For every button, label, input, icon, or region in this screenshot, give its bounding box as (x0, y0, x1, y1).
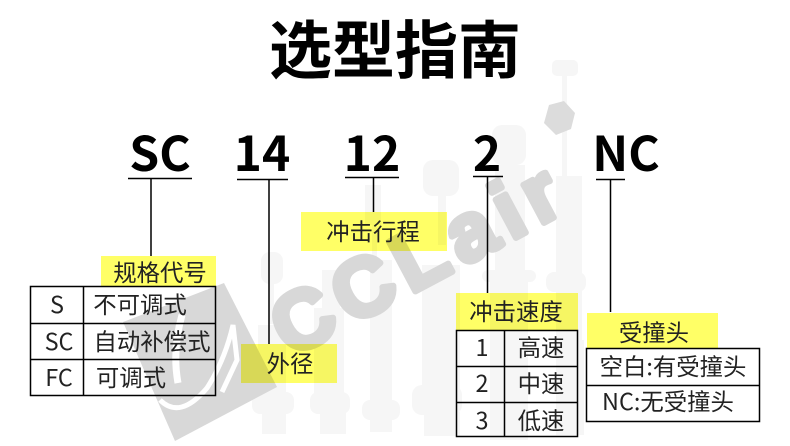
panel: impact speed: 2 (476, 365, 488, 399)
panel: model type: 自动补偿式 (94, 323, 210, 357)
model code: SC: SC (129, 115, 191, 185)
label: outer diameter (241, 344, 337, 383)
panel: impact speed: 1 (476, 329, 488, 363)
model code: 12: 12 (344, 115, 400, 185)
label: stroke (301, 212, 447, 251)
watermark logo: CCLair (256, 142, 583, 374)
panel: model type: SC (45, 323, 74, 357)
panel: model type (30, 254, 216, 396)
panel: model type: FC (45, 359, 73, 393)
panel: model type: 规格代号 (113, 254, 207, 288)
background product photos (252, 60, 586, 440)
title: 选型指南 (269, 1, 521, 92)
model code: 2: 2 (473, 115, 501, 185)
label: stroke: 冲击行程 (326, 213, 420, 247)
model code: NC: NC (592, 115, 660, 185)
panel: impact speed: 低速 (518, 402, 564, 436)
panel: model type: 可调式 (96, 359, 166, 393)
panel: bumper head: 空白:有受撞头 (600, 348, 746, 382)
panel: bumper head: 受撞头 (619, 314, 689, 348)
model code: 14: 14 (234, 115, 290, 185)
panel: impact speed: 高速 (518, 329, 564, 363)
model code: 14 (234, 115, 290, 344)
panel: impact speed (456, 293, 578, 436)
label: outer diameter: 外径 (267, 345, 313, 379)
panel: bumper head (586, 313, 760, 422)
panel: impact speed: 3 (476, 402, 488, 436)
model code: SC (128, 115, 192, 256)
panel: bumper head: NC:无受撞头 (602, 383, 734, 417)
panel: model type: S (50, 286, 64, 320)
watermark logo (123, 101, 583, 441)
model code: 2 (473, 115, 503, 293)
model code: NC (592, 115, 660, 312)
panel: model type: 不可调式 (93, 286, 187, 320)
panel: impact speed: 中速 (518, 365, 564, 399)
panel: impact speed: 冲击速度 (469, 293, 563, 327)
